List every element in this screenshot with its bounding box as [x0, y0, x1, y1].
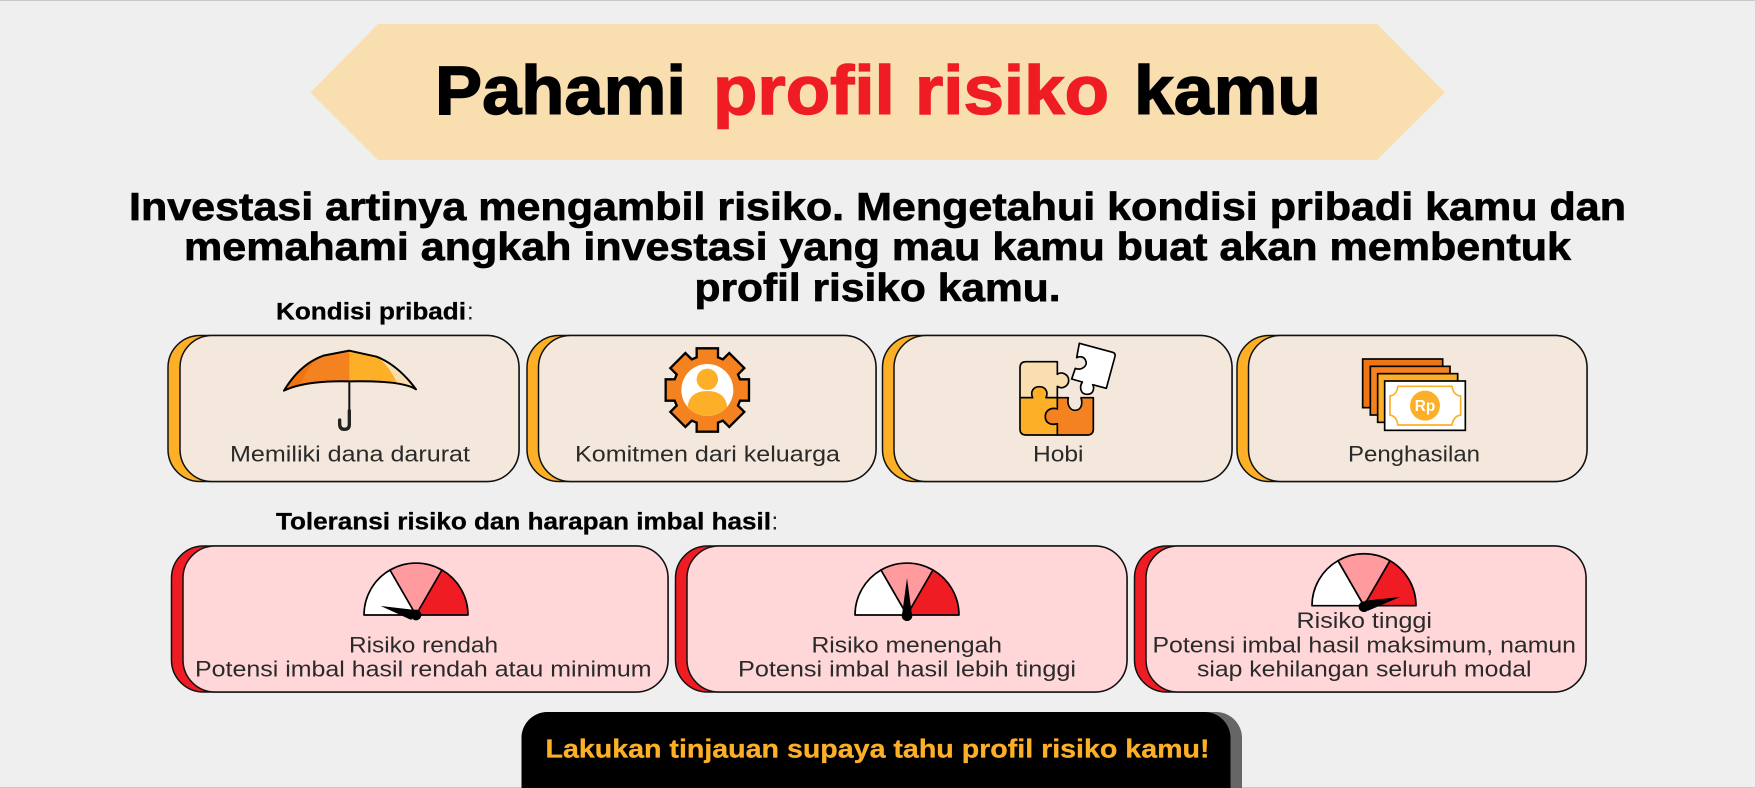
- label: Potensi imbal hasil rendah atau minimum: [195, 656, 652, 682]
- intro paragraph: memahami angkah investasi yang mau kamu buat akan membentuk: [184, 226, 1571, 269]
- label: siap kehilangan seluruh modal: [1197, 656, 1532, 682]
- intro paragraph: [129, 186, 1626, 310]
- label: Potensi imbal hasil lebih tinggi: [738, 656, 1076, 682]
- panel: risiko menengah: [676, 546, 1127, 692]
- heading: toleransi risiko: :: [772, 508, 778, 536]
- gauge: high: [1312, 554, 1416, 612]
- panel: memiliki dana darurat: [168, 336, 519, 482]
- heading: toleransi risiko: Toleransi risiko dan harapan imbal hasil: [276, 508, 771, 536]
- title banner: Pahami: [435, 52, 686, 129]
- icon: gear with person: [666, 348, 749, 432]
- intro paragraph: Investasi artinya mengambil risiko. Mengetahui kondisi pribadi kamu dan: [129, 186, 1626, 229]
- heading: kondisi pribadi: Kondisi pribadi: [276, 298, 466, 326]
- gauge: medium: [855, 563, 959, 621]
- panel: penghasilan: [1237, 336, 1587, 482]
- icon: umbrella: [284, 351, 416, 429]
- icon: puzzle pieces: [1020, 343, 1115, 435]
- label: Risiko rendah: [349, 632, 498, 658]
- label: Potensi imbal hasil maksimum, namun: [1152, 632, 1576, 658]
- panel: risiko rendah: [172, 546, 668, 692]
- gauge: low: [364, 563, 468, 620]
- title banner: [310, 24, 1445, 160]
- heading: kondisi pribadi: :: [467, 298, 474, 326]
- call to action button: Lakukan tinjauan supaya tahu profil risiko kamu!: [546, 734, 1210, 764]
- panel: hobi: [882, 336, 1232, 482]
- label: Risiko tinggi: [1296, 608, 1432, 633]
- icon: stack of banknotes: Rp: [1415, 398, 1435, 415]
- title banner: kamu: [1134, 52, 1321, 129]
- label: Risiko menengah: [812, 632, 1002, 658]
- label: [195, 632, 652, 682]
- call to action button: [522, 712, 1242, 788]
- label: Memiliki dana darurat: [230, 442, 470, 466]
- title banner: profil risiko: [713, 52, 1109, 129]
- intro paragraph: profil risiko kamu.: [694, 267, 1060, 310]
- label: [738, 632, 1076, 682]
- panel: komitmen dari keluarga: [527, 336, 876, 482]
- label: Hobi: [1033, 442, 1084, 466]
- panel: risiko tinggi: [1134, 546, 1586, 692]
- icon: stack of banknotes: [1363, 359, 1465, 430]
- label: Komitmen dari keluarga: [575, 442, 841, 466]
- label: [1152, 608, 1576, 682]
- label: Penghasilan: [1348, 442, 1480, 466]
